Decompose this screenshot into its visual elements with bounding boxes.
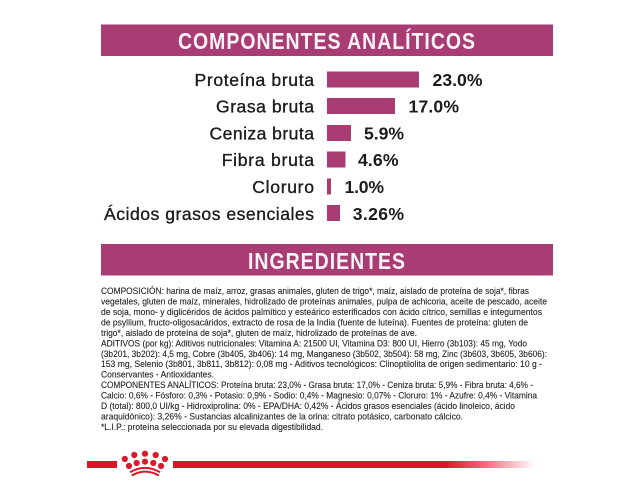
row: ceniza bruta (210, 124, 404, 144)
row: proteína bruta (194, 70, 483, 90)
text block: ingredients and composition: (3b201, 3b202): 4,5 mg, Cobre (3b405, 3b406): 14 mg, Manganeso (3b502, 3b504): 58 mg, Zinc (3b603, 3b605, 3b606): (101, 349, 547, 360)
text block: ingredients and composition: *L.I.P.: proteína seleccionada por su elevada digestibilidad. (101, 422, 323, 433)
row: ceniza bruta: Ceniza bruta (210, 124, 314, 144)
heading: ingredientes: INGREDIENTES (248, 248, 406, 274)
text block: ingredients and composition: vegetales, gluten de maíz, minerales, hidrolizado de proteínas animales, pulpa de achicoria, aceite de pescado, aceite (101, 296, 547, 308)
icon: crown (122, 451, 168, 476)
text block: ingredients and composition: de psyllium, fructo-oligosacáridos, extracto de rosa de la India (fuente de luteína). Fuentes de proteína: gluten de (101, 317, 528, 328)
row: grasa bruta: Grasa bruta (216, 97, 314, 117)
text block: ingredients and composition: araquidónico): 3,26% - Sustancias alcalinizantes de la orina: citrato potásico, carbonato cálcico. (101, 412, 463, 422)
bar chart: analytical components (104, 70, 483, 224)
row: fibra bruta: 4.6% (358, 150, 399, 170)
row: cloruro (252, 177, 384, 197)
heading: ingredientes (101, 244, 553, 276)
text block: ingredients and composition: D (total): 800,0 UI/kg - Hidroxiprolina: 0% - EPA/DHA: 0,42% - Ácidos grasos esenciales (ácido linoleico, ácido (101, 401, 515, 412)
row: cloruro: Cloruro (252, 177, 314, 197)
text block: ingredients and composition: COMPONENTES ANALÍTICOS: Proteína bruta: 23,0% - Grasa bruta: 17,0% - Ceniza bruta: 5,9% - Fibra bruta: 4,6% - (101, 380, 533, 391)
text block: ingredients and composition: trigo*, aislado de proteína de soja*, gluten de maíz, hidrolizado de proteínas de ave. (101, 328, 417, 339)
text block: ingredients and composition: Conservantes - Antioxidantes. (101, 370, 214, 381)
row: ácidos grasos esenciales: 3.26% (353, 204, 404, 224)
row: fibra bruta (222, 150, 399, 170)
row: grasa bruta (216, 97, 459, 117)
row: ácidos grasos esenciales (104, 204, 404, 224)
text block: ingredients and composition: Calcio: 0,6% - Fósforo: 0,3% - Potasio: 0,9% - Sodio: 0,4% - Magnesio: 0,07% - Cloruro: 1% - Azufre: 0,4% - Vitamina (101, 391, 538, 402)
row: grasa bruta: 17.0% (408, 97, 459, 117)
heading: componentes analíticos: COMPONENTES ANALÍTICOS (178, 27, 476, 54)
row: ácidos grasos esenciales: Ácidos grasos esenciales (104, 204, 314, 224)
row: fibra bruta: Fibra bruta (222, 150, 314, 170)
row: ceniza bruta: 5.9% (364, 124, 404, 144)
heading: componentes analíticos (101, 24, 553, 56)
text block: ingredients and composition: 153 mg, Selenio (3b801, 3b811, 3b812): 0,08 mg - Aditivos tecnológicos: Clinoptilolita de origen sedimentario: 10 g - (101, 359, 542, 370)
text block: ingredients and composition (101, 286, 547, 433)
row: proteína bruta: 23.0% (432, 70, 483, 90)
footer: red line with crown logo (87, 451, 535, 476)
text block: ingredients and composition: COMPOSICIÓN: harina de maíz, arroz, grasas animales, gluten de trigo*, maíz, aislado de proteína de soja*, fibras (101, 286, 529, 297)
row: proteína bruta: Proteína bruta (194, 70, 314, 90)
text block: ingredients and composition: de soja, mono- y diglicéridos de ácidos palmítico y esteárico esterificados con ácido cítrico, semillas e integumentos (101, 307, 542, 318)
row: cloruro: 1.0% (344, 177, 384, 197)
text block: ingredients and composition: ADITIVOS (por kg): Aditivos nutricionales: Vitamina A: 21500 UI, Vitamina D3: 800 UI, Hierro (3b103): 45 mg, Yodo (101, 338, 527, 349)
